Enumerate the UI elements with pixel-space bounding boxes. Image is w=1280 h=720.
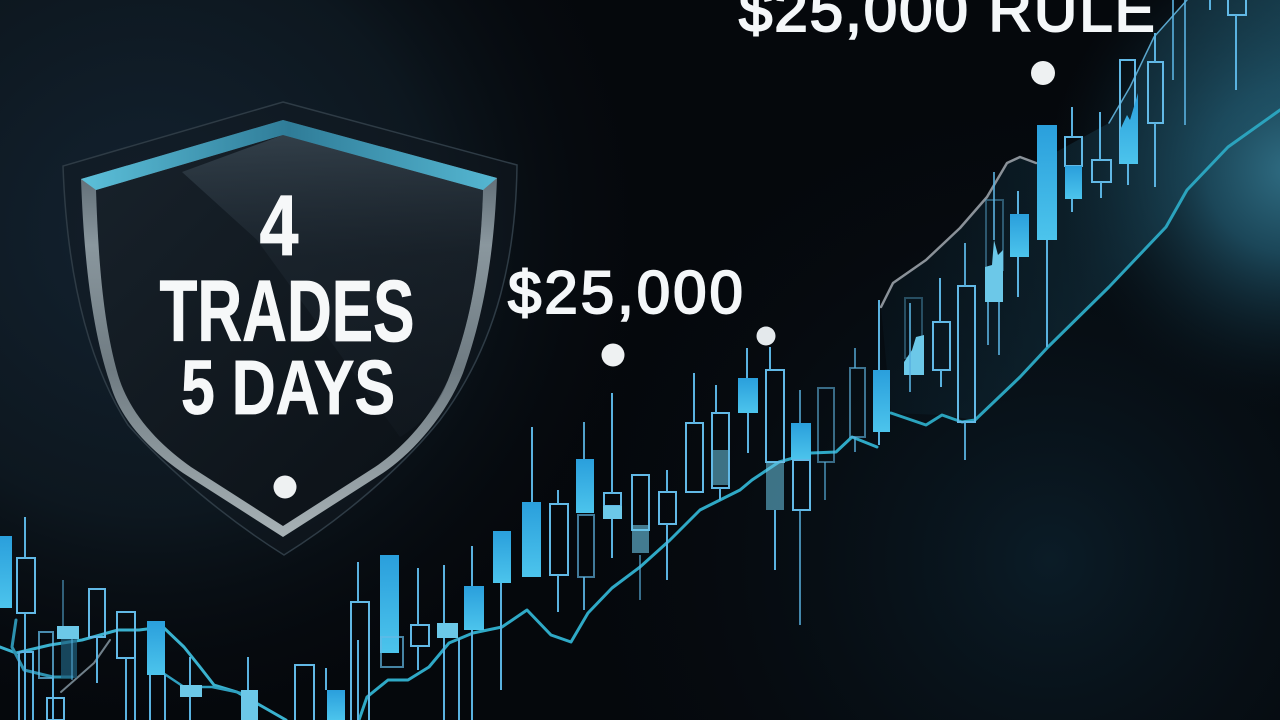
- marker dot: $25,000: [602, 344, 624, 366]
- label: $25,000: $25,000: [508, 259, 746, 326]
- shield heading: 5 days: 5 DAYS: [181, 345, 395, 431]
- marker dot: rule: [1031, 61, 1055, 85]
- shaded area between trend lines: [881, 0, 1280, 420]
- shield heading: 4: 4: [260, 178, 299, 274]
- shield badge: [63, 102, 517, 555]
- marker dot: chart: [756, 326, 776, 346]
- shield dot: [274, 476, 296, 498]
- shield teal top band: [81, 120, 497, 190]
- shield glass highlight: [182, 135, 483, 437]
- shield heading: trades: TRADES: [160, 263, 414, 360]
